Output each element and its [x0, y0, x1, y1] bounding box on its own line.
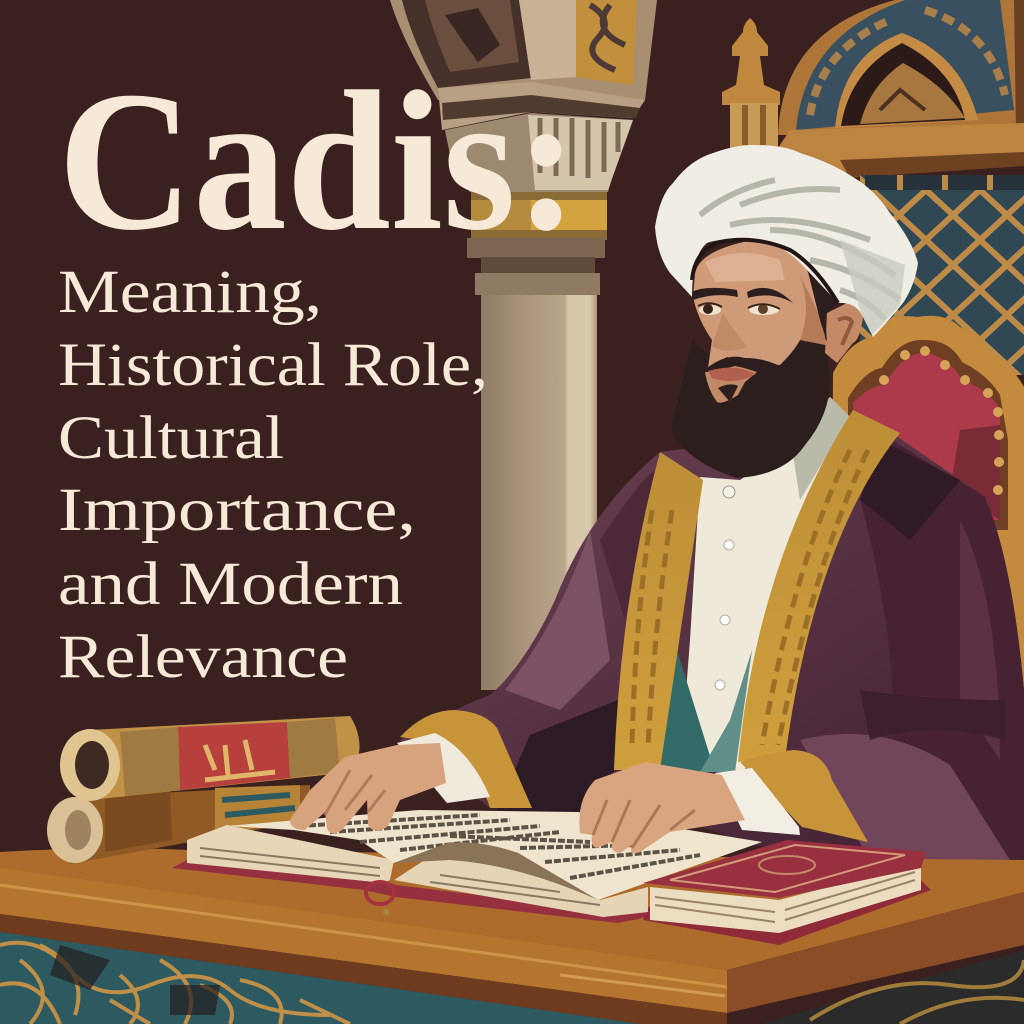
moustache [702, 357, 790, 372]
eyebrows [692, 288, 738, 300]
man [400, 145, 1024, 860]
text page [227, 810, 762, 900]
white shirt [655, 397, 850, 772]
left hand [290, 743, 446, 834]
hands [290, 743, 745, 853]
page blocks [187, 825, 394, 883]
lower face skin [705, 362, 757, 403]
hair at temple [807, 268, 838, 342]
front face [0, 868, 727, 1013]
dark strip [0, 914, 727, 1024]
right hand [579, 762, 745, 853]
title: Cadis: [58, 51, 578, 272]
subtitle: Cultural [58, 405, 284, 472]
ornament band front [0, 932, 640, 1024]
robe [400, 425, 1024, 860]
ribbon loop [366, 882, 394, 904]
subtitle: Relevance [58, 624, 348, 691]
sleeve cuffs [397, 710, 868, 842]
ornament band side [760, 950, 1024, 1024]
shadow fold [394, 842, 598, 900]
open book [172, 810, 762, 923]
subtitle: Meaning, [58, 259, 322, 326]
nose [712, 313, 747, 351]
chair back [830, 316, 1024, 860]
subtitle: Historical Role, [58, 332, 488, 399]
arch [778, 0, 1024, 135]
gold stole [614, 410, 900, 770]
finial [722, 18, 780, 148]
goatee [718, 384, 738, 402]
scrolls [47, 716, 360, 864]
subtitle: and Modern [58, 551, 403, 618]
table [0, 848, 1024, 1024]
upper scroll [60, 716, 360, 801]
beam [778, 123, 1024, 173]
subtitle [58, 259, 488, 691]
face [692, 240, 863, 403]
table top [0, 848, 1024, 970]
architectural column [390, 0, 657, 690]
beard [672, 335, 830, 478]
lattice [860, 175, 1024, 375]
lower scroll [47, 785, 310, 864]
ear [825, 303, 863, 363]
eyes [699, 305, 721, 315]
subtitle: Importance, [58, 477, 416, 544]
throne canopy and lattice [722, 0, 1024, 375]
closed red book [643, 840, 931, 945]
side face [727, 892, 1024, 1013]
lips [708, 368, 756, 381]
turban [655, 145, 918, 337]
cover [172, 860, 660, 923]
